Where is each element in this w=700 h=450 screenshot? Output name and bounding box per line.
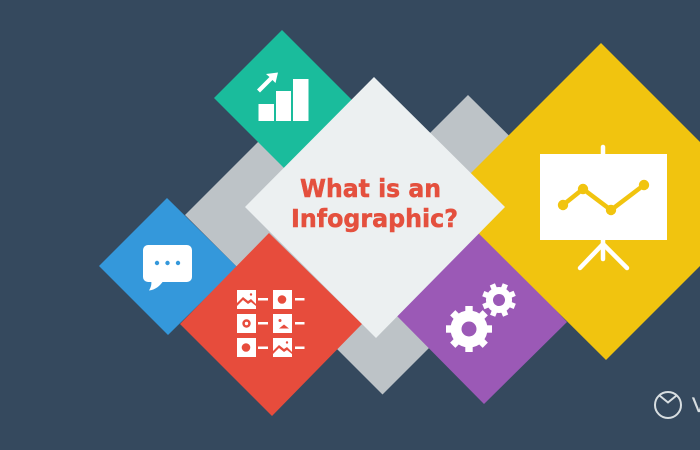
title: What is an xyxy=(300,174,441,203)
panel: right gray diamond xyxy=(276,95,576,394)
title xyxy=(291,174,458,233)
icon: large gear xyxy=(446,306,492,352)
panel: purple diamond with gears xyxy=(396,230,567,404)
icon: small gear xyxy=(477,278,521,322)
logo xyxy=(655,392,700,418)
title: Infographic? xyxy=(291,204,458,233)
icon: presentation board xyxy=(540,147,667,268)
panel: central white diamond xyxy=(245,77,505,338)
panel: red diamond with list xyxy=(180,233,362,416)
panel: left gray diamond xyxy=(185,115,375,305)
icon: image list xyxy=(237,290,304,357)
panel: blue diamond with speech bubble xyxy=(99,198,237,335)
icon: bar chart with arrow xyxy=(257,72,308,121)
line chart on board xyxy=(558,180,649,215)
icon: speech bubble xyxy=(143,245,192,290)
panel: teal diamond with growth chart xyxy=(214,30,352,168)
panel: yellow diamond with presentation board xyxy=(444,43,700,360)
